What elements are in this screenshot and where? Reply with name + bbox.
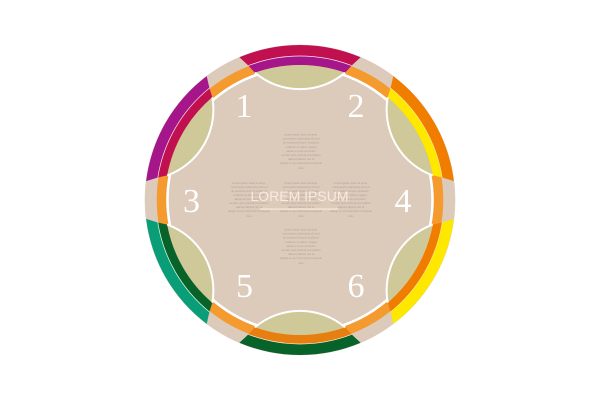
text block: top: Lorem ipsum dolor sit amet, — [284, 132, 318, 136]
beige disc — [145, 45, 455, 355]
text block: left: do eiusmod tempor incididunt — [231, 189, 267, 193]
text block: left — [228, 181, 270, 218]
text block: centre: duis — [298, 214, 304, 218]
segment: bottom — [239, 311, 361, 355]
text block: bottom: do eiusmod tempor incididunt — [283, 236, 319, 240]
text block: bottom: ut labore et dolore magna — [285, 240, 317, 244]
text block: bottom — [280, 228, 322, 265]
text block: right: aliqua ut enim ad minim — [336, 197, 366, 201]
number 6: 6 — [348, 268, 364, 305]
number 2: 2 — [348, 88, 364, 125]
text block: right: aliquip ex ea commodo consequat — [330, 209, 372, 213]
segment: upper left — [135, 70, 234, 197]
number 1: 1 — [236, 88, 252, 125]
text block: centre: ut labore et dolore magna — [285, 193, 317, 197]
title: LOREM IPSUM — [250, 188, 349, 204]
text block: top: ut labore et dolore magna — [285, 145, 317, 149]
text block: left: Lorem ipsum dolor sit amet, — [232, 181, 266, 185]
text block: top: duis — [298, 166, 304, 170]
text block: left: duis — [246, 214, 252, 218]
text block: centre — [280, 181, 322, 218]
text block: bottom: ullamco laboris nisi ut — [288, 252, 314, 256]
text block: centre: ullamco laboris nisi ut — [288, 205, 314, 209]
text block: left: aliquip ex ea commodo consequat — [228, 209, 270, 213]
text block: top: aliquip ex ea commodo consequat — [280, 161, 322, 165]
text block: left: ut labore et dolore magna — [233, 193, 265, 197]
text block: right: duis — [348, 214, 354, 218]
segment: top — [239, 45, 361, 89]
number 4: 4 — [394, 183, 412, 220]
text block: top: ullamco laboris nisi ut — [288, 157, 314, 161]
text block: right: veniam quis nostrud exercitation — [331, 201, 371, 205]
text block: top: do eiusmod tempor incididunt — [283, 141, 319, 145]
text block: centre: do eiusmod tempor incididunt — [283, 189, 319, 193]
orange connector ring — [162, 62, 438, 338]
white inner ring — [168, 68, 432, 332]
text block: top: aliqua ut enim ad minim — [286, 149, 316, 153]
segment: lower right — [366, 203, 465, 330]
segment: lower left — [135, 203, 234, 330]
text block: centre: veniam quis nostrud exercitation — [281, 201, 321, 205]
text block: left: ullamco laboris nisi ut — [236, 205, 262, 209]
text block: bottom: aliquip ex ea commodo consequat — [280, 256, 322, 260]
text block: bottom: consectetur adipiscing elit sed — [283, 232, 320, 236]
text block: bottom: Lorem ipsum dolor sit amet, — [284, 228, 318, 232]
text block: centre: Lorem ipsum dolor sit amet, — [284, 181, 318, 185]
text block: right: ullamco laboris nisi ut — [338, 205, 364, 209]
text block: centre: aliquip ex ea commodo consequat — [280, 209, 322, 213]
text block: bottom: aliqua ut enim ad minim — [286, 244, 316, 248]
text block: right — [330, 181, 372, 218]
text block: top — [280, 132, 322, 170]
segment: upper right — [366, 70, 465, 197]
text block: left: veniam quis nostrud exercitation — [229, 201, 269, 205]
text block: left: aliqua ut enim ad minim — [234, 197, 264, 201]
number 3: 3 — [183, 183, 200, 220]
text block: bottom: duis — [298, 261, 304, 265]
text block: left: consectetur adipiscing elit sed — [231, 185, 268, 189]
text block: right: do eiusmod tempor incididunt — [333, 189, 369, 193]
text block: right: ut labore et dolore magna — [335, 193, 367, 197]
title underline — [260, 208, 338, 210]
text block: top: consectetur adipiscing elit sed — [283, 137, 320, 141]
text block: right: Lorem ipsum dolor sit amet, — [334, 181, 368, 185]
text block: bottom: veniam quis nostrud exercitation — [281, 248, 321, 252]
text block: right: consectetur adipiscing elit sed — [333, 185, 370, 189]
text block: centre: consectetur adipiscing elit sed — [283, 185, 320, 189]
text block: centre: aliqua ut enim ad minim — [286, 197, 316, 201]
number 5: 5 — [236, 268, 253, 305]
text block: top: veniam quis nostrud exercitation — [281, 153, 321, 157]
